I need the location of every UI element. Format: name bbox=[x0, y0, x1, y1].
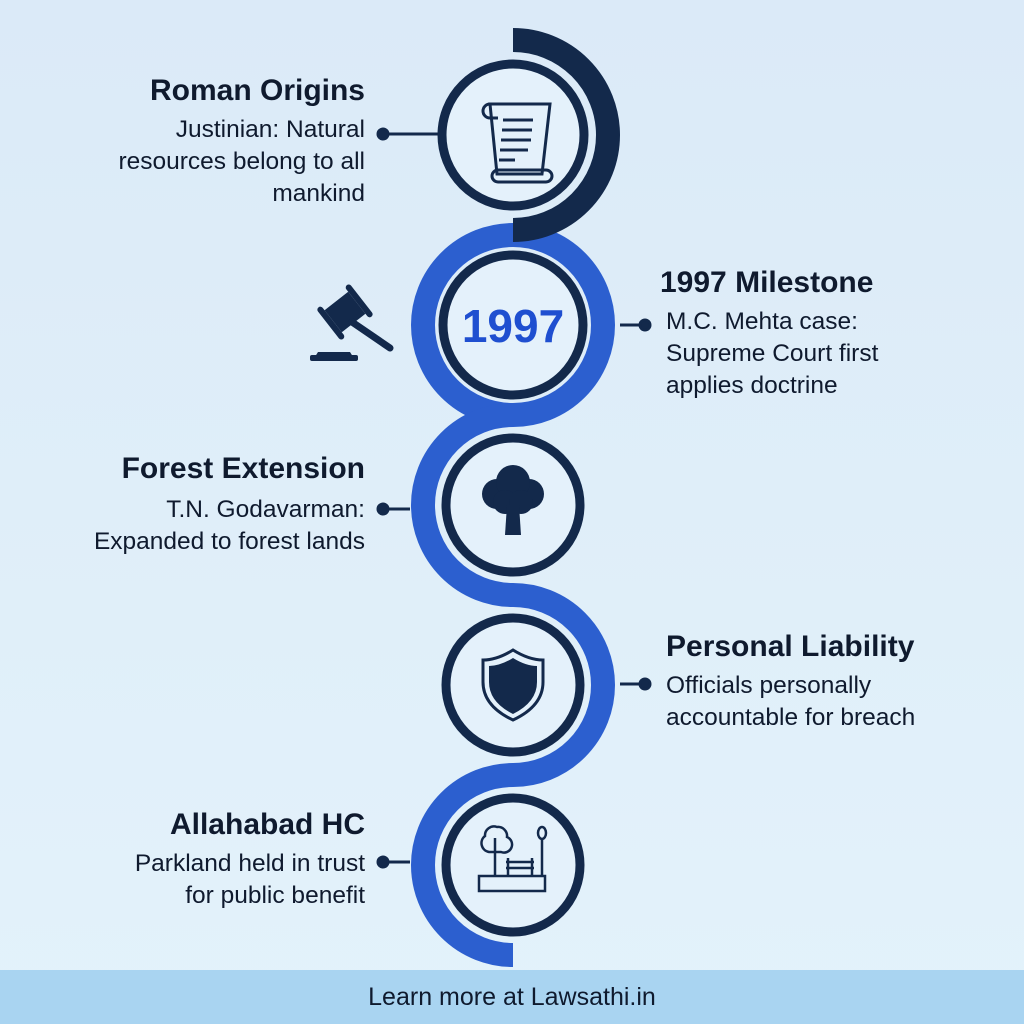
text: Allahabad HC bbox=[135, 808, 365, 909]
text: Personal Liability bbox=[666, 630, 915, 731]
icon: gavel bbox=[310, 283, 390, 361]
text: 1997 Milestone: 1997 Milestone bbox=[660, 266, 873, 299]
icon: shield bbox=[483, 650, 543, 720]
icon: tree bbox=[482, 465, 544, 535]
text: Forest Extension: Expanded to forest lands bbox=[94, 528, 365, 555]
snake path bbox=[423, 235, 603, 955]
text: Roman Origins: resources belong to all bbox=[118, 148, 365, 175]
circles bbox=[442, 64, 584, 932]
text: 1997 Milestone: M.C. Mehta case: bbox=[666, 308, 858, 335]
text: Forest Extension: Forest Extension bbox=[122, 452, 365, 485]
text: Roman Origins: Roman Origins bbox=[150, 74, 365, 107]
text: Personal Liability: Officials personally bbox=[666, 672, 871, 699]
text: Forest Extension bbox=[94, 452, 365, 555]
text: Personal Liability: accountable for breach bbox=[666, 704, 915, 731]
footer: Learn more at Lawsathi.in bbox=[368, 983, 656, 1011]
navy arc bbox=[513, 40, 608, 230]
text: 1997 Milestone bbox=[660, 266, 878, 399]
text: 1997 Milestone: applies doctrine bbox=[666, 372, 838, 399]
text: Allahabad HC: for public benefit bbox=[185, 882, 365, 909]
icon: scroll bbox=[483, 104, 552, 182]
text: Forest Extension: T.N. Godavarman: bbox=[166, 496, 365, 523]
text: Personal Liability: Personal Liability bbox=[666, 630, 914, 663]
text: Roman Origins bbox=[118, 74, 365, 207]
text: Allahabad HC: Parkland held in trust bbox=[135, 850, 365, 877]
connectors bbox=[378, 129, 650, 867]
footer bbox=[0, 970, 1024, 1024]
text: 1997 Milestone: Supreme Court first bbox=[666, 340, 878, 367]
year 1997: 1997 bbox=[462, 300, 564, 352]
icon: park bbox=[479, 826, 546, 891]
text: Roman Origins: mankind bbox=[272, 180, 365, 207]
text: Roman Origins: Justinian: Natural bbox=[176, 116, 365, 143]
text: Allahabad HC: Allahabad HC bbox=[170, 808, 365, 841]
